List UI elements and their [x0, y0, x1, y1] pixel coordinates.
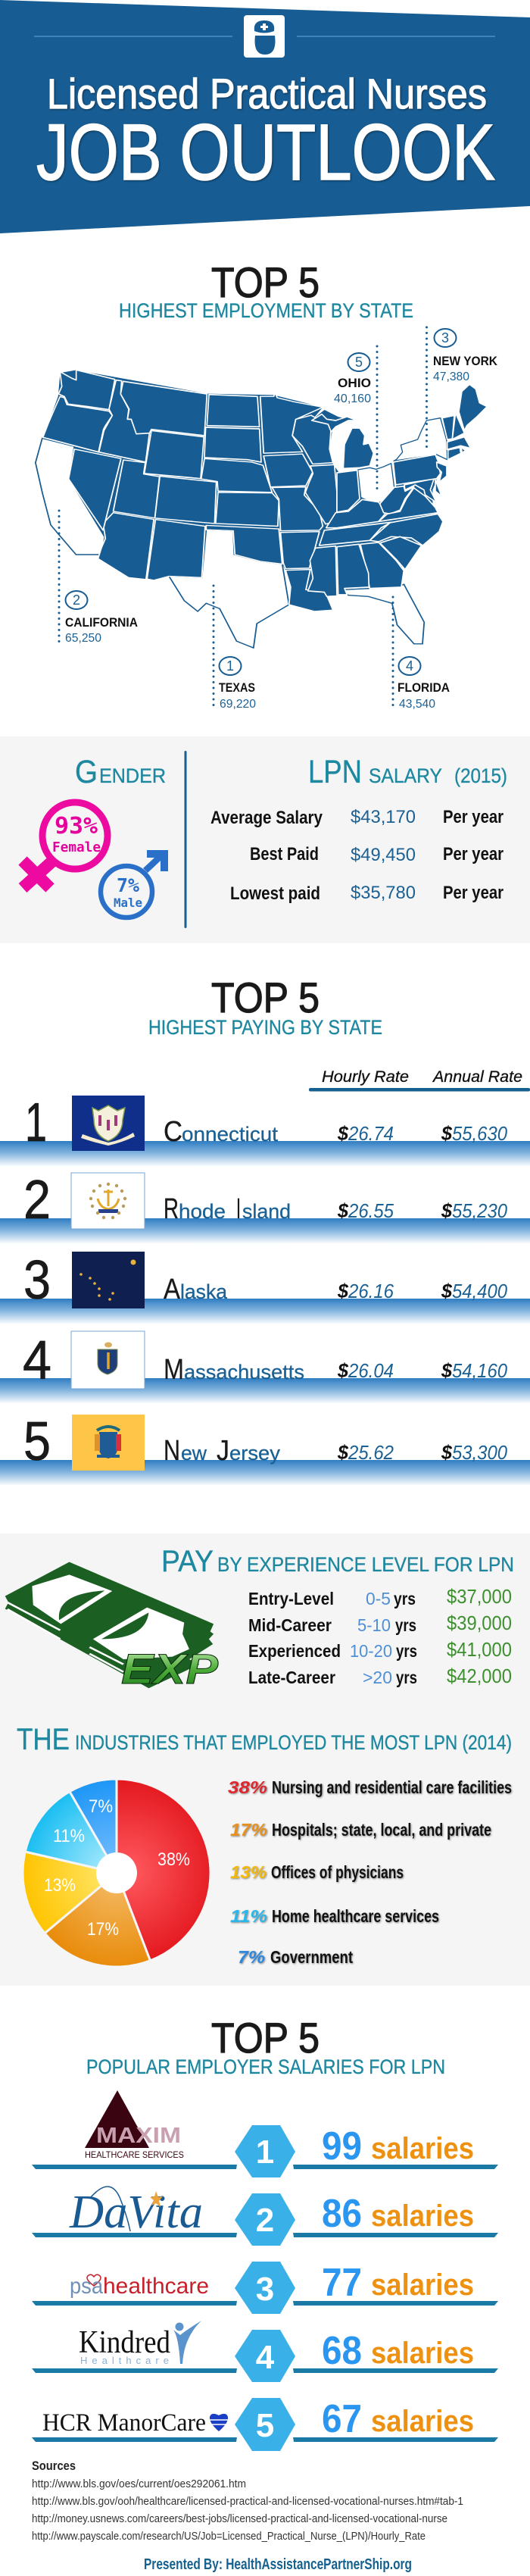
callout: Florida: 43,540 [399, 698, 435, 711]
row: Alaska: 26.16 [348, 1280, 394, 1302]
flag: Massachusetts [71, 1331, 145, 1389]
logo: Kindred Healthcare: Kindred [79, 2325, 170, 2360]
heading: LPN salary: (2015) [454, 764, 507, 787]
experience table: $39,000 [447, 1612, 512, 1634]
experience table: $41,000 [447, 1638, 512, 1661]
row: Maxim: 99 [322, 2124, 362, 2168]
row: Massachusetts [0, 1330, 530, 1404]
row: New Jersey: $ [337, 1441, 349, 1464]
logo: Maxim Healthcare Services: MAXIM [96, 2124, 181, 2148]
row: Alaska: 54,400 [452, 1280, 507, 1302]
row: Maxim [32, 2090, 498, 2177]
row: Rhode Island: R [164, 1193, 179, 1225]
row: Rhode Island: hode [179, 1200, 226, 1223]
callout: Texas: 69,220 [220, 698, 256, 711]
heading: top 5 highest paying by state [148, 974, 382, 1039]
experience table: Experienced [248, 1641, 341, 1661]
logo: Kindred Healthcare [79, 2321, 201, 2366]
sources [32, 2459, 463, 2543]
icon: money stack [5, 1562, 219, 1693]
row: Connecticut: 26.74 [348, 1122, 394, 1145]
experience table: 10-20 [350, 1641, 392, 1661]
logo: Maxim Healthcare Services: HEALTHCARE SERVICES [85, 2149, 184, 2160]
row: New Jersey: 5 [23, 1411, 51, 1472]
logo: HCR ManorCare: HCR ManorCare [42, 2409, 206, 2437]
row: PSA Healthcare [32, 2261, 498, 2314]
experience table: Mid-Career [248, 1615, 332, 1635]
row: Rhode Island: $ [337, 1199, 349, 1222]
heading: pay by experience [161, 1545, 514, 1578]
row: New Jersey: $ [441, 1441, 453, 1464]
callout: Florida [393, 597, 450, 711]
callout: California: 65,250 [65, 632, 101, 645]
logo: PSA Healthcare: psa [70, 2274, 103, 2299]
row: Connecticut: onnecticut [182, 1123, 279, 1146]
salary table: Average Salary [210, 808, 323, 828]
flag: Connecticut [72, 1096, 145, 1151]
heading: LPN salary: SALARY [369, 764, 442, 787]
map: United States [36, 370, 487, 648]
icon: female symbol: Female [52, 839, 101, 855]
experience table: yrs [394, 1589, 416, 1608]
salary table: Lowest paid [230, 883, 320, 904]
row: Connecticut: $ [441, 1122, 453, 1145]
footer: presented by: Presented By: HealthAssistancePartnerShip.org [144, 2556, 412, 2573]
salary table: Per year [443, 883, 504, 903]
experience table [248, 1585, 512, 1687]
row: Massachusetts: $ [441, 1359, 453, 1382]
title [36, 70, 495, 197]
icon: male symbol: Male [114, 896, 142, 910]
row: DaVita: 86 [322, 2192, 362, 2236]
heading: top 5 highest employment by state: HIGHEST EMPLOYMENT BY STATE [119, 299, 413, 322]
sources: Sources [32, 2459, 76, 2473]
row: Connecticut: $ [337, 1122, 349, 1145]
icon: female symbol [23, 802, 108, 888]
row: Alaska: $ [441, 1280, 453, 1302]
callout: Texas [214, 586, 256, 711]
callout: Texas: 1 [226, 658, 234, 674]
row: HCR ManorCare: salaries [371, 2405, 474, 2438]
row: New Jersey: 25.62 [348, 1441, 394, 1464]
header banner [0, 0, 530, 233]
callout: Florida: FLORIDA [398, 680, 450, 695]
icon: nurse [244, 15, 285, 58]
heading: top 5 popular employer salaries: POPULAR EMPLOYER SALARIES FOR LPN [86, 2055, 445, 2078]
table header: rates [309, 1068, 530, 1091]
pie chart: 11% [53, 1826, 85, 1846]
heading: LPN salary: LPN [308, 754, 362, 790]
row: HCR ManorCare: 67 [322, 2397, 362, 2441]
icon: male symbol: 7% [117, 874, 139, 896]
logo: Maxim Healthcare Services [85, 2090, 184, 2160]
row: New Jersey: N [164, 1435, 180, 1467]
sources: http://www.payscale.com/research/US/Job=Licensed_Practical_Nurse_(LPN)/Hourly_Rate [32, 2530, 426, 2543]
salary table: Per year [443, 844, 504, 864]
pie chart: 13% [44, 1875, 76, 1896]
legend: industries: 11% [230, 1906, 267, 1926]
heading: gender [75, 754, 166, 790]
row: HCR ManorCare [32, 2397, 498, 2451]
experience table: >20 [363, 1668, 392, 1687]
row: Alaska: $ [337, 1280, 349, 1302]
row: Maxim: salaries [371, 2132, 474, 2165]
row: Massachusetts: M [164, 1354, 184, 1386]
row: Connecticut: C [164, 1116, 182, 1148]
row: New Jersey [0, 1411, 530, 1486]
row: Alaska [0, 1250, 530, 1324]
pie chart [23, 1779, 210, 1967]
heading: industries: THE [17, 1723, 70, 1756]
row: Connecticut: 55,630 [452, 1122, 507, 1145]
experience table: yrs [396, 1668, 417, 1687]
callout: New York: 47,380 [433, 370, 469, 383]
row: Kindred: 4 [256, 2339, 275, 2376]
heading: pay by experience: PAY [161, 1545, 214, 1578]
row: Maxim: 1 [256, 2134, 274, 2171]
row: Rhode Island: sland [242, 1200, 291, 1223]
row: Kindred: 68 [322, 2329, 362, 2373]
logo: PSA Healthcare: healthcare [103, 2274, 209, 2299]
heading: top 5 highest paying by state: HIGHEST PAYING BY STATE [148, 1016, 382, 1039]
callout: New York: 3 [441, 330, 449, 345]
heading: top 5 popular employer salaries [86, 2014, 445, 2078]
row: Rhode Island: I [236, 1193, 241, 1225]
row: New Jersey: ersey [229, 1442, 280, 1465]
legend: industries: Government [270, 1947, 353, 1967]
legend: industries [228, 1777, 512, 1967]
row: Kindred: salaries [371, 2337, 474, 2370]
row: Massachusetts: $ [337, 1359, 349, 1382]
callout: New York [427, 327, 498, 447]
title: Licensed Practical Nurses [47, 70, 487, 117]
legend: industries: 38% [228, 1777, 267, 1797]
callout: Ohio: 40,160 [334, 392, 371, 405]
icon: female symbol: 93% [55, 813, 98, 839]
flag: Rhode Island [71, 1173, 145, 1229]
salary table: $43,170 [351, 807, 416, 827]
flag: Alaska [72, 1252, 145, 1308]
experience table: yrs [395, 1615, 416, 1635]
row: DaVita [32, 2187, 498, 2246]
row: Rhode Island: 55,230 [452, 1199, 507, 1222]
legend: industries: Offices of physicians [271, 1862, 404, 1882]
legend: industries: Home healthcare services [272, 1906, 439, 1926]
experience table: Late-Career [248, 1668, 335, 1687]
row: Alaska: laska [180, 1280, 228, 1303]
logo: DaVita: DaVita [69, 2187, 203, 2238]
flag: New Jersey [72, 1415, 145, 1471]
legend: industries: 17% [230, 1820, 267, 1840]
callout: Texas: TEXAS [219, 680, 255, 695]
sources: http://www.bls.gov/oes/current/oes292061.htm [32, 2478, 246, 2490]
heading: gender: G [75, 754, 98, 790]
row: New Jersey: 53,300 [452, 1441, 507, 1464]
row: New Jersey: ew [181, 1442, 207, 1465]
salary table: $49,450 [351, 845, 416, 865]
callout: Ohio: OHIO [338, 376, 371, 390]
row: Rhode Island [0, 1170, 530, 1244]
experience table: yrs [396, 1641, 417, 1661]
row: Massachusetts: assachusetts [184, 1361, 304, 1383]
callout: Ohio [334, 346, 377, 491]
icon: male symbol [101, 850, 168, 918]
sources: http://www.bls.gov/ooh/healthcare/licensed-practical-and-licensed-vocational-nurses.htm#tab-1 [32, 2495, 463, 2508]
callout: California [59, 511, 138, 646]
row: Kindred [32, 2321, 498, 2382]
salary table: $35,780 [351, 883, 416, 903]
salary table [210, 807, 504, 904]
experience table: 5-10 [357, 1615, 391, 1635]
row: Connecticut: 1 [25, 1093, 47, 1153]
row: Rhode Island: 26.55 [348, 1199, 394, 1222]
heading: gender: ENDER [99, 764, 166, 787]
row: Massachusetts: 4 [23, 1330, 51, 1391]
sources: http://money.usnews.com/careers/best-jobs/licensed-practical-and-licensed-vocational-nurse [32, 2512, 447, 2525]
row: Connecticut [0, 1093, 530, 1167]
row: Alaska: 3 [23, 1250, 51, 1311]
callout: Ohio: 5 [355, 355, 363, 370]
row: PSA Healthcare: salaries [371, 2268, 474, 2302]
legend: industries: 13% [230, 1862, 267, 1882]
row: Rhode Island: $ [441, 1199, 453, 1222]
callout: California: 2 [73, 592, 80, 608]
row: DaVita: 2 [256, 2202, 274, 2239]
heading: top 5 popular employer salaries: TOP 5 [211, 2014, 320, 2062]
experience table: 0-5 [366, 1589, 391, 1608]
panel: gender and salary [0, 736, 530, 943]
experience table: $42,000 [447, 1665, 512, 1687]
pie chart: 7% [89, 1796, 113, 1817]
logo: Kindred Healthcare: Healthcare [80, 2355, 169, 2366]
row: HCR ManorCare: 5 [256, 2407, 274, 2444]
legend: industries: 7% [238, 1947, 265, 1967]
row: Massachusetts: 54,160 [452, 1359, 507, 1382]
heading: top 5 highest employment by state: TOP 5 [211, 258, 320, 306]
callout: Florida: 4 [406, 658, 413, 674]
table header: rates: Annual Rate [432, 1068, 522, 1086]
heading: industries [17, 1723, 512, 1756]
callout: California: CALIFORNIA [65, 615, 138, 630]
experience table: $37,000 [447, 1585, 512, 1608]
heading: top 5 highest employment by state [119, 258, 413, 322]
row: Massachusetts: 26.04 [348, 1359, 394, 1382]
row: PSA Healthcare: 77 [322, 2261, 362, 2305]
pie chart: 38% [157, 1849, 190, 1870]
row: Rhode Island: 2 [23, 1170, 51, 1230]
row: Alaska: A [164, 1274, 181, 1305]
panel: pay and industries [0, 1533, 530, 1986]
salary table: Per year [443, 807, 504, 827]
salary table: Best Paid [250, 844, 319, 864]
pie chart: 17% [87, 1919, 119, 1940]
row: DaVita: salaries [371, 2199, 474, 2233]
icon: money stack: EXP [121, 1645, 219, 1693]
row: PSA Healthcare: 3 [256, 2271, 274, 2308]
table header: rates: Hourly Rate [322, 1068, 409, 1086]
row: New Jersey: J [217, 1435, 229, 1467]
experience table: Entry-Level [248, 1589, 334, 1608]
heading: LPN salary [308, 754, 507, 790]
callout: New York: NEW YORK [433, 354, 498, 368]
heading: top 5 highest paying by state: TOP 5 [211, 974, 320, 1021]
